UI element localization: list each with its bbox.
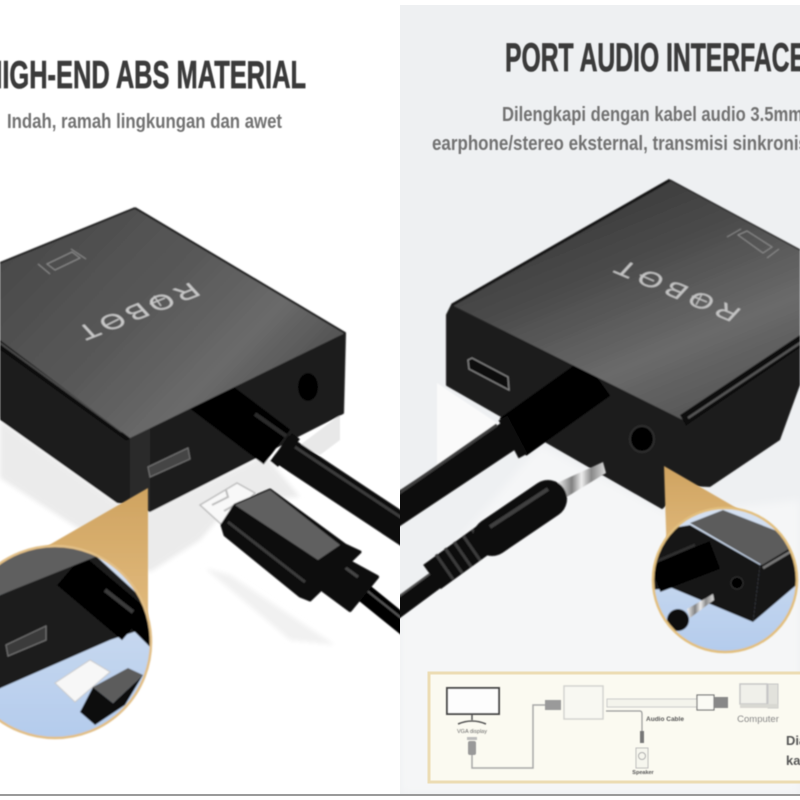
description: audio cable	[432, 104, 800, 155]
label: VGA display: VGA display	[457, 729, 487, 735]
panel: connection diagram	[429, 673, 800, 782]
adapter: black VGA adapter, left view	[0, 208, 425, 572]
label: computer: Computer	[737, 714, 779, 725]
icon: screen mark	[38, 249, 86, 274]
icon: adapter	[564, 686, 603, 719]
callout: magnified audio port	[650, 505, 800, 655]
callout: magnified micro HDMI port	[0, 544, 154, 740]
label: audio cable: Audio Cable	[646, 716, 684, 723]
connector: micro USB plug	[200, 483, 410, 645]
port: micro HDMI slot	[148, 448, 190, 477]
port: audio jack	[298, 373, 318, 401]
icon: screen mark	[727, 229, 779, 258]
callout: gold magnifier beam	[663, 466, 738, 538]
port: audio jack	[630, 426, 654, 452]
text: clipped diagram note	[786, 733, 800, 768]
port: zoomed slot	[6, 626, 46, 656]
panel: port audio interface	[385, 5, 800, 794]
cable: audio line	[606, 711, 642, 731]
label: speaker: Speaker	[632, 770, 655, 776]
connector: audio plug	[640, 731, 644, 743]
connector: zoomed plug	[55, 660, 110, 702]
connector: zoomed jack plug	[687, 594, 714, 618]
panel: high-end ABS material	[0, 60, 400, 740]
cable: main lead	[195, 385, 425, 544]
logo: ROBOT: ROBOT	[71, 278, 206, 345]
cable: HDMI line	[607, 695, 728, 710]
port: micro HDMI	[468, 358, 509, 390]
cable: main lead	[385, 377, 597, 518]
icon: speaker	[636, 748, 648, 768]
cable: VGA line	[472, 705, 545, 768]
connector: VGA plug to adapter	[545, 700, 561, 710]
icon: computer	[740, 684, 778, 708]
port: zoomed jack	[731, 577, 743, 589]
logo: ROBOT: ROBOT	[608, 255, 747, 326]
adapter: black VGA adapter, right view	[385, 180, 800, 518]
connector: 3.5mm audio jack	[385, 462, 606, 618]
icon: VGA display	[447, 688, 499, 724]
connector: VGA plug	[467, 737, 477, 755]
subtitle: left description: Indah, ramah lingkungan dan awet	[7, 111, 282, 133]
bottom border line	[0, 794, 800, 796]
callout: gold magnifier beam	[47, 488, 149, 618]
